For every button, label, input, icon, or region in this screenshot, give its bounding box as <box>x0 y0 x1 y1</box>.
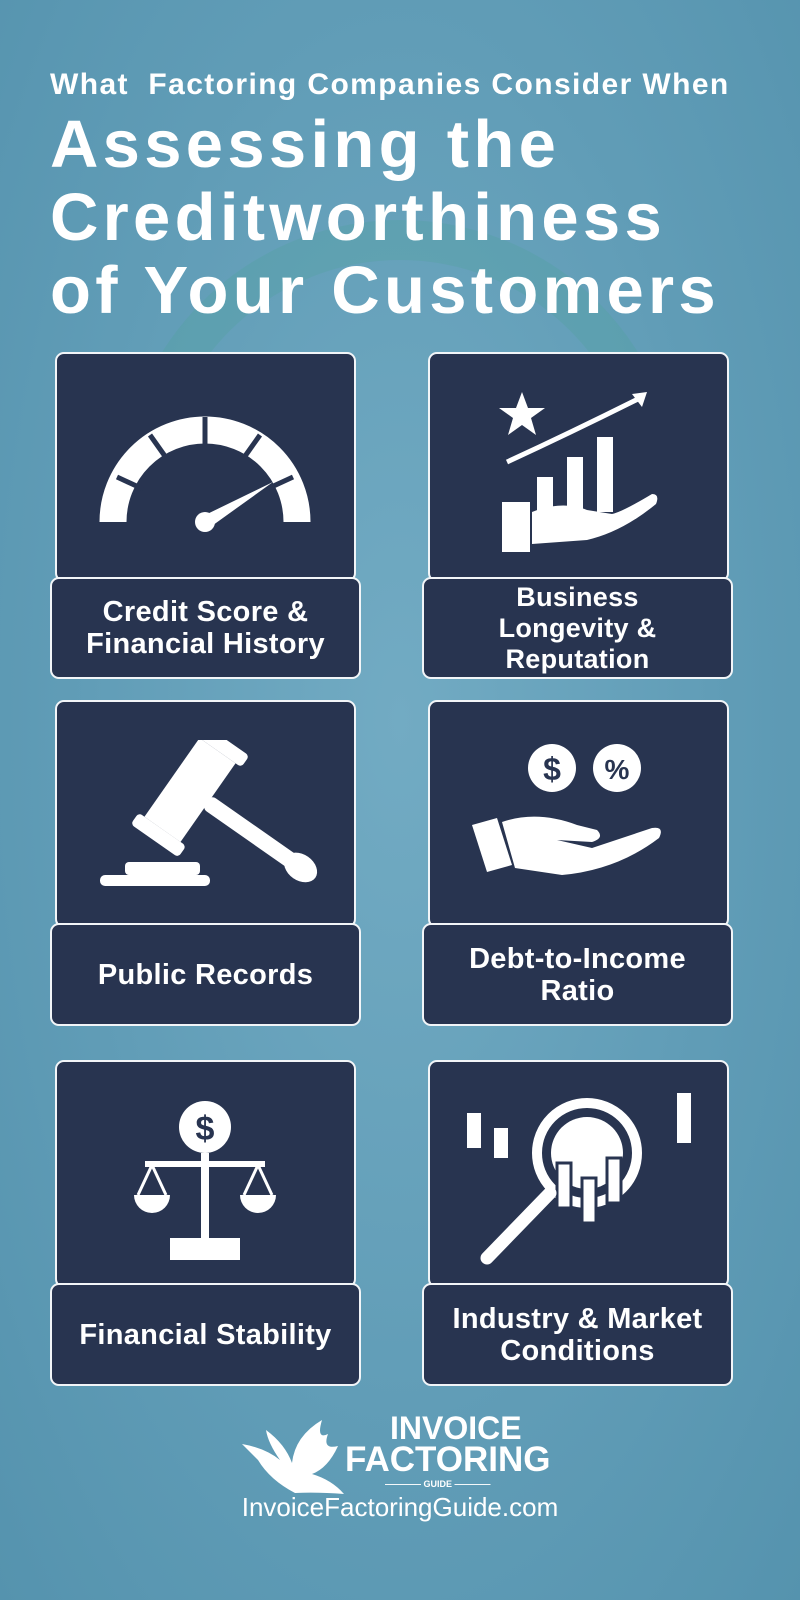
label <box>50 1283 361 1386</box>
main heading: of Your Customers <box>50 253 720 328</box>
label: Financial Stability <box>79 1318 332 1350</box>
panel: industry & market <box>422 1060 733 1386</box>
icon: scales <box>134 1101 276 1260</box>
label: Debt-to-Income <box>469 942 686 974</box>
label: Reputation <box>506 644 650 674</box>
decorative background ring <box>162 220 637 352</box>
title <box>50 68 730 328</box>
logo: ———— GUIDE ———— <box>385 1479 491 1489</box>
label <box>422 923 733 1026</box>
icon: growth hand <box>499 392 658 552</box>
label <box>422 577 733 679</box>
label: Conditions <box>500 1334 655 1366</box>
logo text: INVOICE <box>390 1410 522 1446</box>
icon: eagle wings <box>242 1420 344 1494</box>
label: Credit Score & <box>103 596 308 628</box>
icon: hand with coins: $ <box>543 751 561 787</box>
label: Longevity & <box>499 612 656 642</box>
icon: speedometer <box>100 416 310 532</box>
label: Business <box>516 582 639 612</box>
label: Ratio <box>540 974 614 1006</box>
label: Financial History <box>86 628 325 660</box>
label <box>50 923 361 1026</box>
logo <box>242 1410 550 1494</box>
icon: scales: $ <box>196 1110 215 1148</box>
panel: business longevity <box>422 352 733 679</box>
label: Public Records <box>98 958 313 990</box>
label: Industry & Market <box>452 1302 703 1334</box>
panel: credit score <box>50 352 361 679</box>
label <box>50 577 361 679</box>
panel: public records <box>50 700 361 1026</box>
label <box>422 1283 733 1386</box>
subtitle: What Factoring Companies Consider When <box>50 68 730 101</box>
icon: magnifier with candles <box>467 1093 691 1264</box>
icon: hand with coins: % <box>605 754 630 785</box>
icon: hand with coins <box>472 744 661 875</box>
website url: InvoiceFactoringGuide.com <box>242 1492 558 1522</box>
main heading: Creditworthiness <box>50 180 666 255</box>
panel: debt to income <box>422 700 733 1026</box>
icon: gavel <box>100 740 318 886</box>
panel: financial stability <box>50 1060 361 1386</box>
logo: FACTORING <box>345 1440 550 1479</box>
main heading: Assessing the <box>50 107 560 182</box>
main heading <box>50 107 720 328</box>
